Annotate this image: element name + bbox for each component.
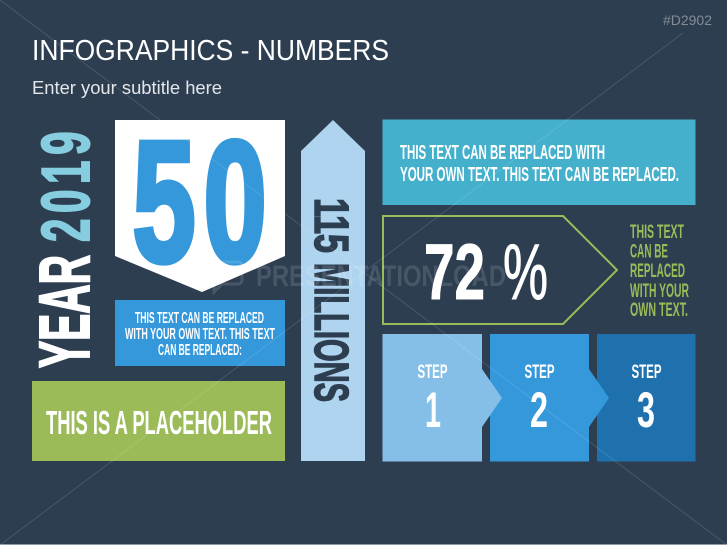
step 3: 3 [637, 382, 655, 438]
panel: 72 percent callout: 72 [424, 227, 485, 316]
year label: YEAR [26, 255, 105, 368]
title: INFOGRAPHICS - NUMBERS [32, 35, 389, 67]
step 2 [490, 334, 609, 462]
arrow: 115 millions: MILLIONS [304, 263, 357, 402]
watermark [214, 260, 506, 293]
panel: blue text box: THIS TEXT CAN BE REPLACED [135, 310, 264, 327]
green side text [630, 222, 689, 321]
step 1: STEP [418, 362, 448, 383]
arrow: 115 millions [301, 120, 365, 461]
panel: teal text box [382, 120, 696, 205]
step 3 [597, 334, 696, 462]
product code: #D2902 [663, 12, 712, 28]
step 2: 2 [530, 382, 548, 438]
panel: green placeholder: THIS IS A PLACEHOLDER [46, 405, 272, 442]
panel: 72 percent callout: % [503, 227, 548, 316]
year label: 2019 [28, 126, 103, 242]
arrow: 115 millions: 115 [304, 198, 357, 253]
watermark: PRESENTATIONLOAD [256, 260, 506, 293]
subtitle: Enter your subtitle here [32, 78, 222, 98]
step 1 [382, 334, 502, 462]
panel: blue text box: WITH YOUR OWN TEXT. THIS TEXT [125, 326, 275, 343]
green side text: THIS TEXT [630, 222, 684, 243]
step 2: STEP [524, 362, 555, 383]
panel: 72 percent callout [383, 216, 617, 324]
step 1: 1 [425, 382, 441, 438]
panel: blue text box: CAN BE REPLACED: [158, 342, 242, 359]
step 3: STEP [632, 362, 662, 383]
panel: 50 shield: 50 [132, 105, 275, 298]
panel: blue text box [115, 300, 285, 366]
panel: green placeholder [32, 381, 285, 461]
green side text: CAN BE [630, 242, 668, 262]
